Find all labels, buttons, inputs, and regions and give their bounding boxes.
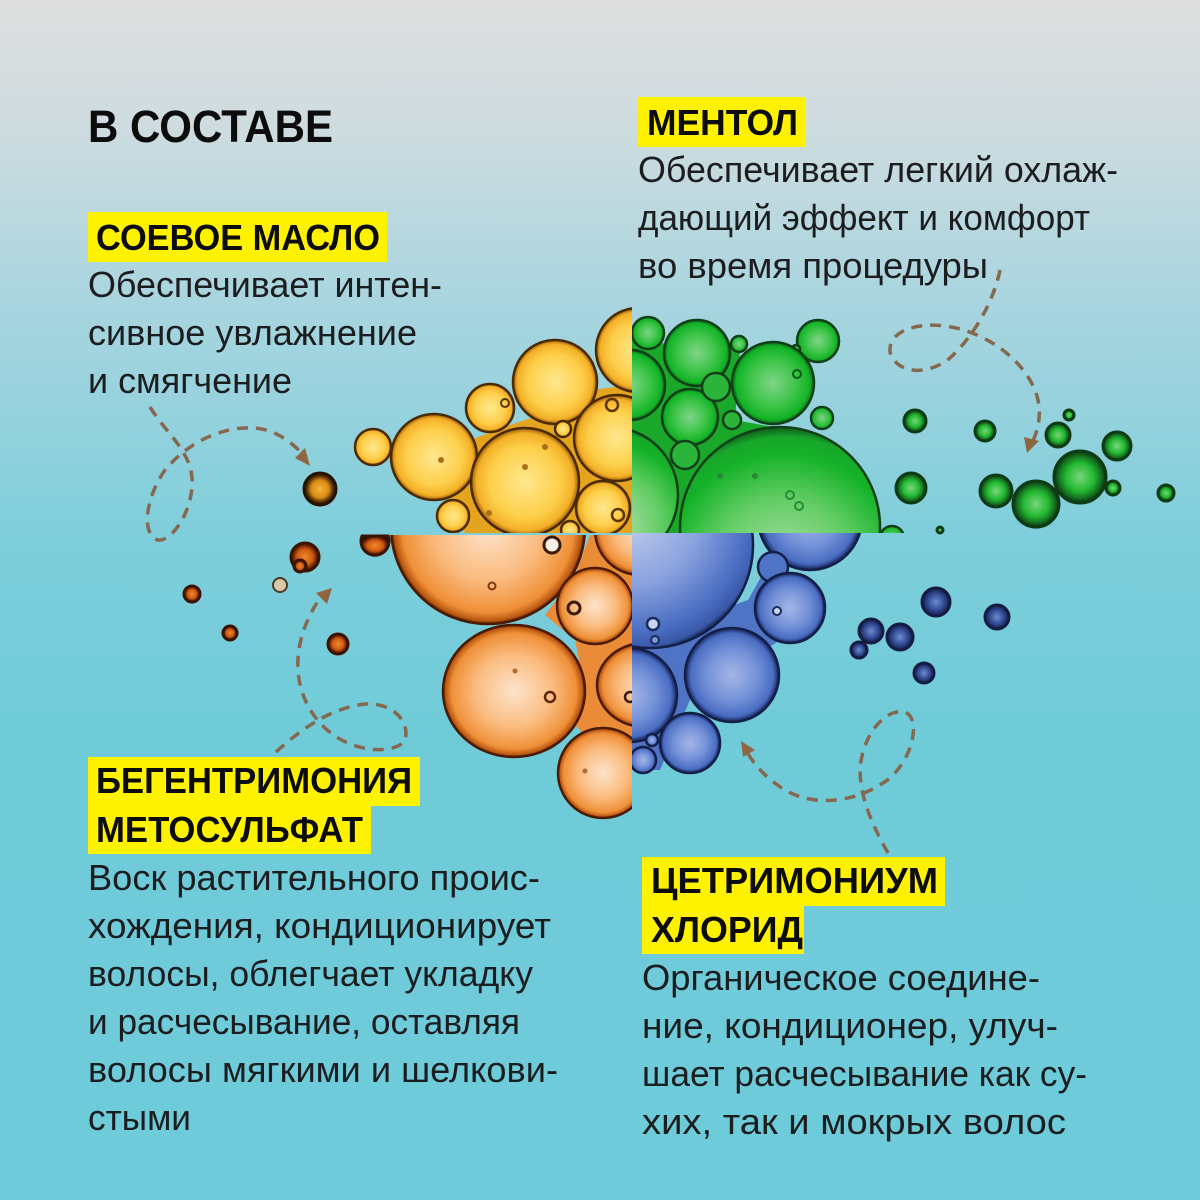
text: behentrimonium description: стыми: [88, 1097, 191, 1138]
bubble: yellow droplet: [304, 473, 336, 505]
title: В СОСТАВЕ: [88, 101, 333, 152]
arrow: behentrimonium: [276, 588, 406, 752]
ingredient: soybean oil: [88, 212, 442, 401]
text: cetrimonium description: ние, кондиционер, улуч-: [642, 1005, 1058, 1046]
text: behentrimonium description: волосы, облегчает укладку: [88, 953, 533, 994]
text: behentrimonium description: [88, 857, 558, 1138]
text: menthol description: во время процедуры: [638, 245, 988, 286]
bubbles: orange droplets: [184, 536, 389, 654]
text: menthol description: дающий эффект и комфорт: [638, 197, 1090, 238]
arrow: menthol: [890, 270, 1039, 453]
text: soybean oil description: и смягчение: [88, 360, 292, 401]
text: soybean oil description: [88, 264, 442, 401]
text: cetrimonium description: шает расчесывание как су-: [642, 1053, 1087, 1094]
bubbles: orange cluster: [390, 535, 632, 820]
text: behentrimonium description: волосы мягкими и шелкови-: [88, 1049, 558, 1090]
ingredient: cetrimonium chloride: [642, 857, 1087, 1142]
text: cetrimonium description: хих, так и мокрых волос: [642, 1101, 1066, 1142]
heading: behentrimonium methosulfate: МЕТОСУЛЬФАТ: [96, 809, 363, 850]
bubbles: green cluster: [632, 316, 904, 533]
bubbles: green droplets: [896, 410, 1174, 533]
heading: behentrimonium methosulfate: [88, 757, 420, 854]
text: behentrimonium description: хождения, кондиционирует: [88, 905, 551, 946]
text: soybean oil description: сивное увлажнение: [88, 312, 417, 353]
text: cetrimonium description: Органическое соедине-: [642, 957, 1040, 998]
arrow: cetrimonium: [741, 712, 913, 853]
bubbles: blue droplets: [851, 588, 1009, 683]
arrow: soybean oil: [147, 407, 310, 540]
text: menthol description: Обеспечивает легкий охлаж-: [638, 149, 1118, 190]
text: menthol description: [638, 149, 1118, 286]
heading: cetrimonium chloride: ЦЕТРИМОНИУМ: [651, 860, 938, 901]
text: cetrimonium description: [642, 957, 1087, 1142]
ingredient: behentrimonium methosulfate: [88, 757, 558, 1138]
heading: menthol: МЕНТОЛ: [647, 102, 798, 143]
text: behentrimonium description: и расчесывание, оставляя: [88, 1001, 520, 1042]
text: soybean oil description: Обеспечивает интен-: [88, 264, 442, 305]
heading: behentrimonium methosulfate: БЕГЕНТРИМОНИЯ: [96, 760, 412, 801]
text: behentrimonium description: Воск растительного проис-: [88, 857, 540, 898]
heading: cetrimonium chloride: ХЛОРИД: [651, 909, 803, 950]
bubbles: blue cluster: [632, 533, 862, 774]
bubbles: yellow cluster: [354, 307, 632, 533]
heading: cetrimonium chloride: [642, 857, 945, 954]
ingredient: menthol: [638, 97, 1118, 286]
heading: soybean oil: СОЕВОЕ МАСЛО: [96, 217, 380, 258]
